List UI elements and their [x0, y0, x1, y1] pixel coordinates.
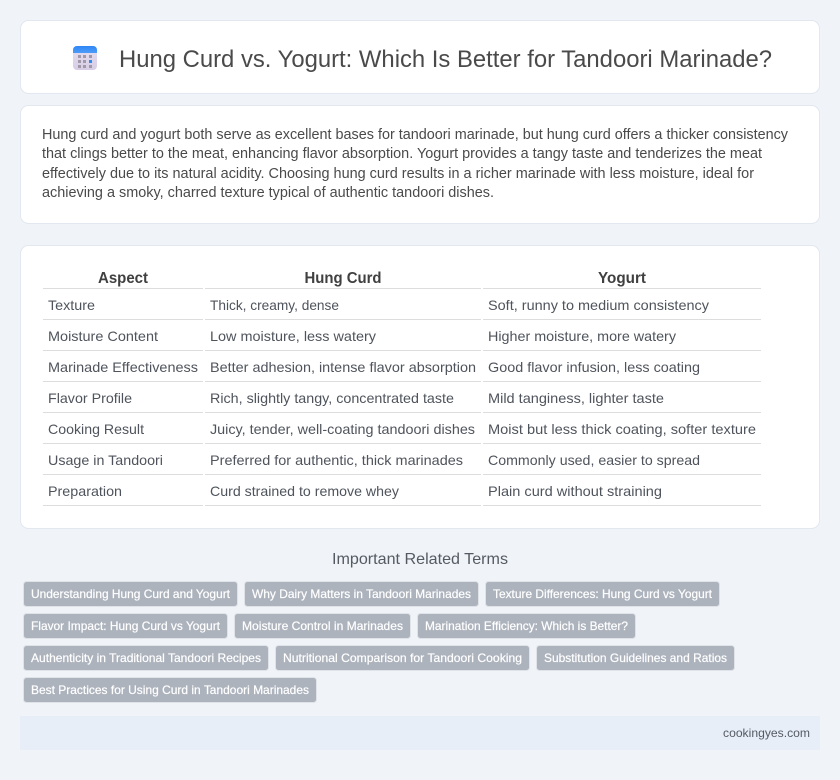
related term tags: Nutritional Comparison for Tandoori Cooking	[283, 651, 522, 665]
related term tags: Understanding Hung Curd and Yogurt	[31, 587, 231, 601]
related term tags: Authenticity in Traditional Tandoori Recipes	[31, 651, 261, 665]
icon: calendar	[73, 46, 97, 70]
footer	[20, 716, 820, 750]
footer source: cookingyes.com	[723, 726, 810, 740]
related term tags: Why Dairy Matters in Tandoori Marinades	[252, 587, 471, 601]
table rows: Preferred for authentic, thick marinades	[210, 452, 463, 468]
table rows: Cooking Result	[48, 421, 144, 437]
table rows: Marinade Effectiveness	[48, 359, 198, 375]
table rows: Usage in Tandoori	[48, 452, 163, 468]
table rows: Moisture Content	[48, 328, 158, 344]
heading: related terms: Important Related Terms	[332, 551, 508, 568]
table rows: Curd strained to remove whey	[210, 483, 399, 499]
table rows: Better adhesion, intense flavor absorption	[210, 359, 476, 375]
intro text: achieving a smoky, charred texture typical of authentic tandoori dishes.	[42, 185, 494, 201]
table rows: Thick, creamy, dense	[210, 297, 339, 313]
table rows: Higher moisture, more watery	[488, 328, 676, 344]
related term tags: Texture Differences: Hung Curd vs Yogurt	[493, 587, 713, 601]
panel: comparison table	[20, 246, 820, 528]
table rows: Good flavor infusion, less coating	[488, 359, 700, 375]
table header: Yogurt	[598, 270, 647, 287]
table rows: Preparation	[48, 483, 122, 499]
table header: Aspect	[98, 270, 149, 287]
table rows	[48, 297, 756, 499]
table rows: Texture	[48, 297, 95, 313]
table rows: Commonly used, easier to spread	[488, 452, 700, 468]
panel: intro	[20, 106, 820, 224]
related term tags: Marination Efficiency: Which is Better?	[425, 619, 628, 633]
related term tags: Flavor Impact: Hung Curd vs Yogurt	[31, 619, 221, 633]
table rows: Low moisture, less watery	[210, 328, 376, 344]
table rows: Juicy, tender, well-coating tandoori dishes	[210, 421, 475, 437]
table rows: Soft, runny to medium consistency	[488, 297, 709, 313]
intro text	[42, 127, 789, 201]
table rows: Rich, slightly tangy, concentrated taste	[210, 390, 454, 406]
table rows: Flavor Profile	[48, 390, 132, 406]
table header: Hung Curd	[304, 270, 382, 287]
related term tags: Best Practices for Using Curd in Tandoori Marinades	[31, 683, 309, 697]
related term tags: Moisture Control in Marinades	[242, 619, 403, 633]
table header	[98, 270, 647, 287]
related term tags	[24, 582, 734, 702]
table rows: Mild tanginess, lighter taste	[488, 390, 664, 406]
intro text: that clings better to the meat, enhancing flavor absorption. Yogurt provides a tangy taste and tenderizes the meat	[42, 146, 762, 162]
title panel	[20, 20, 820, 94]
intro text: effectively due to its natural acidity. Choosing hung curd results in a richer marinade with less moisture, ideal for	[42, 166, 754, 182]
intro text: Hung curd and yogurt both serve as excellent bases for tandoori marinade, but hung curd offers a thicker consistency	[42, 127, 789, 143]
table rows: Moist but less thick coating, softer texture	[488, 421, 756, 437]
table rows: Plain curd without straining	[488, 483, 662, 499]
title: Hung Curd vs. Yogurt: Which Is Better for Tandoori Marinade?	[119, 46, 772, 73]
related term tags: Substitution Guidelines and Ratios	[544, 651, 727, 665]
